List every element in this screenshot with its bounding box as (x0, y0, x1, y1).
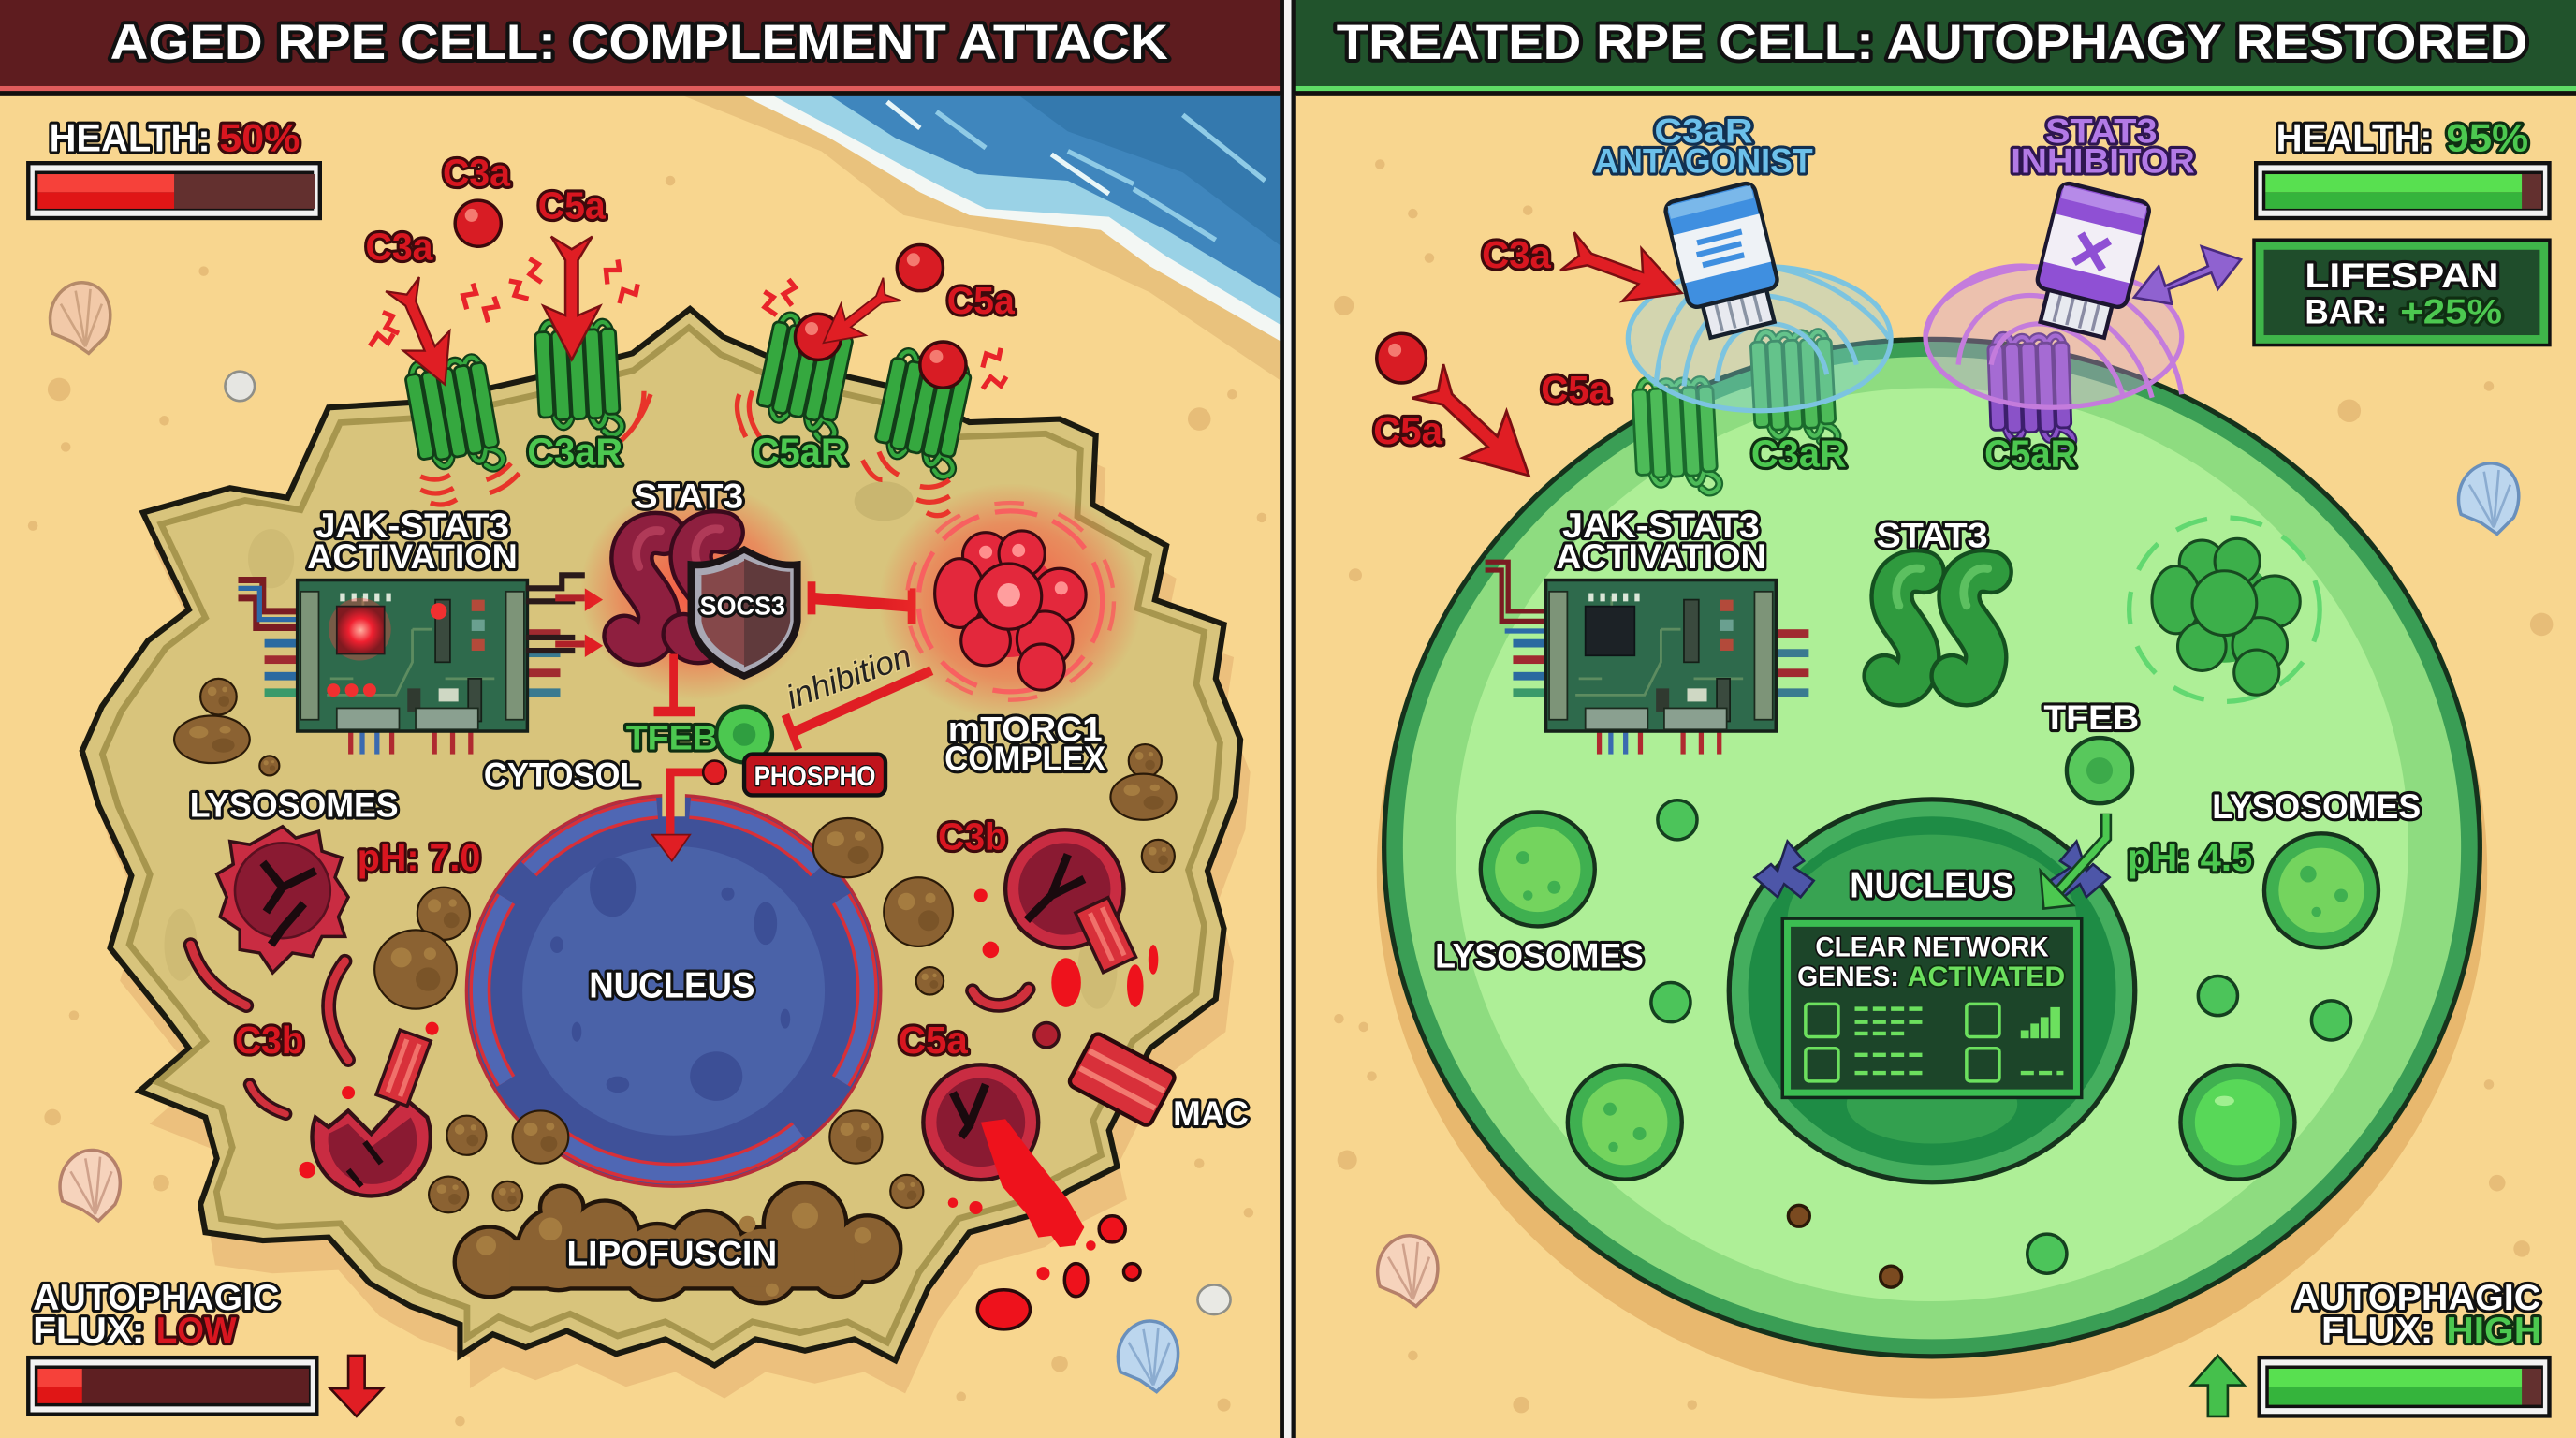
bottle: C3aR antagonist (1663, 182, 1787, 341)
inhibition T bars (654, 581, 931, 749)
autophagic flux hud high: FLUX: (2321, 1311, 2433, 1351)
autophagic flux hud low: LOW (156, 1311, 237, 1351)
MAC pore (1068, 1032, 1249, 1133)
blocked complement arrows: C5a (1373, 409, 1443, 452)
sand speckles right (1334, 159, 2553, 1413)
blocked complement arrows: C5a (1541, 368, 1611, 411)
lifespan callout: LIFESPAN (2305, 257, 2499, 295)
health hud: HEALTH: (50, 115, 211, 159)
beach water and shore (681, 95, 1281, 381)
bottle: STAT3 inhibitor (2027, 182, 2151, 341)
mTORC1 complex: COMPLEX (944, 740, 1106, 778)
text labels: cytosol, lysosomes, pH (190, 756, 640, 879)
icon: shell top left (51, 283, 110, 353)
autophagic flux hud high (2191, 1278, 2552, 1418)
damaged cell body (82, 309, 1251, 1399)
genes console: GENES: (1797, 961, 1899, 992)
drug halo: blue (1628, 266, 1891, 411)
circuit board: quiet: ACTIVATION (1556, 537, 1766, 576)
blocked complement arrows: C3a (1482, 233, 1551, 276)
healthy lysosomes (1479, 810, 2380, 1181)
receptor labels: C5aR (753, 431, 848, 474)
icon: white pebble (1197, 1284, 1231, 1314)
MAC pore: MAC (1173, 1094, 1249, 1133)
nucleus treated (1727, 797, 2137, 1184)
lipofuscin deposits: LIPOFUSCIN (567, 1234, 777, 1272)
text labels: cytosol, lysosomes, pH: pH: 7.0 (358, 836, 480, 879)
lysosome labels and pH: pH: 4.5 (2128, 836, 2252, 879)
lifespan callout: BAR: (2305, 293, 2387, 331)
complement labels and balls: C5a (947, 279, 1015, 322)
mTORC1 complex (879, 483, 1142, 778)
nucleus aged (466, 787, 881, 1186)
circuit board: JAK-STAT3: ACTIVATION (307, 537, 518, 576)
lifespan callout (2252, 238, 2552, 346)
health hud (26, 115, 322, 220)
icon: flux up arrow (2191, 1356, 2244, 1416)
autophagic flux hud low: AUTOPHAGIC (33, 1278, 279, 1318)
icon: shell lower left (60, 1150, 120, 1221)
complement labels and balls (366, 151, 1015, 322)
damage labels (235, 814, 1007, 1062)
text labels: cytosol, lysosomes, pH: LYSOSOMES (190, 785, 399, 824)
text: inhibition: inhibition (782, 638, 916, 716)
genes console: CLEAR NETWORK (1815, 932, 2049, 962)
circuit board: quiet: JAK-STAT3 (1562, 506, 1760, 545)
receptor labels (527, 431, 848, 474)
damage labels: C3b (235, 1019, 304, 1062)
circuit board: JAK-STAT3 (238, 506, 603, 755)
receptors treated (1632, 329, 1838, 496)
complement labels and balls: C3a (366, 225, 433, 268)
bound complement balls (795, 314, 966, 388)
TFEB and phospho: TFEB (626, 718, 718, 756)
treated cell body (1377, 337, 2487, 1399)
sand speckles (28, 176, 1266, 1426)
small damaged vesicle (1034, 1023, 1059, 1048)
autophagic flux hud high: AUTOPHAGIC (2292, 1278, 2540, 1318)
nucleus aged: NUCLEUS (589, 965, 754, 1005)
health hud right: HEALTH: (2276, 115, 2432, 159)
lysosome labels and pH (1435, 787, 2421, 976)
icon: pebble (225, 372, 255, 401)
icon: shell blue (1118, 1321, 1178, 1392)
damage labels: C5a (899, 1019, 968, 1062)
blocked complement arrows (1373, 225, 1691, 499)
health hud right: 95% (2446, 115, 2528, 159)
lifespan callout: +25% (2400, 293, 2502, 331)
shield: SOCS3 (692, 550, 797, 675)
genes console (1781, 917, 2083, 1099)
complement labels and balls: C3a (443, 151, 510, 194)
circuit board: JAK-STAT3: JAK-STAT3 (315, 506, 509, 545)
header: aged (0, 0, 1280, 96)
genes console: ACTIVATED (1908, 961, 2065, 992)
STAT3 with SOCS3 shield: STAT3 (634, 477, 743, 515)
drug labels: ANTAGONIST (1594, 141, 1813, 180)
receptors (403, 313, 974, 481)
mTORC1 complex: mTORC1 (948, 711, 1103, 749)
attack arrows (379, 237, 904, 394)
lipofuscin deposits (457, 1184, 899, 1301)
receptor labels: C3aR (527, 431, 622, 474)
shield: SOCS3: SOCS3 (700, 591, 785, 620)
receptor labels treated: C5aR (1984, 432, 2076, 475)
drug labels (1594, 112, 2195, 180)
autophagic flux hud low (26, 1278, 383, 1416)
phospho import arrow (652, 761, 726, 861)
drug halo: purple (1925, 266, 2182, 407)
icon: shell blue right (2458, 463, 2519, 534)
autophagic flux hud low: FLUX: (33, 1311, 144, 1351)
lysosome labels and pH: LYSOSOMES (2212, 787, 2421, 826)
lysosome: ruptured lower left (312, 1030, 431, 1196)
panel: treated RPE cell (1296, 0, 2576, 1438)
lysosome: attacked right (1005, 829, 1136, 973)
icon: shell pink right (1378, 1236, 1438, 1306)
lysosome: intact damaged (217, 827, 348, 973)
lipofuscin granules (174, 679, 1177, 1212)
title aged: AGED RPE CELL: COMPLEMENT ATTACK (110, 15, 1168, 70)
STAT3 with SOCS3 shield (580, 477, 816, 700)
small vesicles (1651, 800, 2351, 1273)
autophagic flux hud high: HIGH (2446, 1311, 2541, 1351)
header: treated (1296, 0, 2576, 96)
title treated: TREATED RPE CELL: AUTOPHAGY RESTORED (1337, 15, 2527, 70)
drug labels: INHIBITOR (2011, 141, 2195, 180)
damage sparks (367, 257, 1008, 516)
STAT3 green: STAT3 (1876, 516, 1988, 554)
health hud right (2254, 115, 2552, 220)
text labels: cytosol, lysosomes, pH: CYTOSOL (484, 756, 640, 795)
lysosome: bleeding with pore (923, 1064, 1038, 1180)
receptor labels treated (1751, 432, 2076, 475)
divider (1280, 0, 1296, 1438)
drug labels: STAT3 (2045, 112, 2157, 151)
TFEB and phospho: PHOSPHO (754, 761, 875, 792)
receptor C5aR purple (1987, 333, 2073, 451)
receptor labels treated: C3aR (1751, 432, 1847, 475)
STAT3 green (1876, 516, 1991, 684)
lysosome labels and pH: LYSOSOMES (1435, 937, 1644, 976)
TFEB treated (2041, 698, 2139, 909)
residual lipofuscin dots (1788, 1205, 1902, 1287)
complement labels and balls: C5a (538, 183, 606, 227)
nucleus treated: NUCLEUS (1850, 865, 2014, 905)
nuclear pores (1754, 842, 2110, 897)
panel: aged RPE cell (0, 0, 1281, 1438)
icon: flux down arrow (330, 1356, 383, 1416)
drug labels: C3aR (1654, 112, 1753, 151)
mTORC1 quiet (2130, 518, 2320, 701)
health hud: 50% (219, 115, 300, 159)
damage labels: C3b (938, 814, 1007, 858)
TFEB and phospho (626, 707, 886, 795)
TFEB treated: TFEB (2043, 698, 2139, 737)
blood spill (299, 889, 1158, 1329)
membrane fragments (191, 945, 1029, 1114)
purple double arrow (2134, 246, 2241, 304)
circuit board: quiet (1486, 506, 1808, 755)
